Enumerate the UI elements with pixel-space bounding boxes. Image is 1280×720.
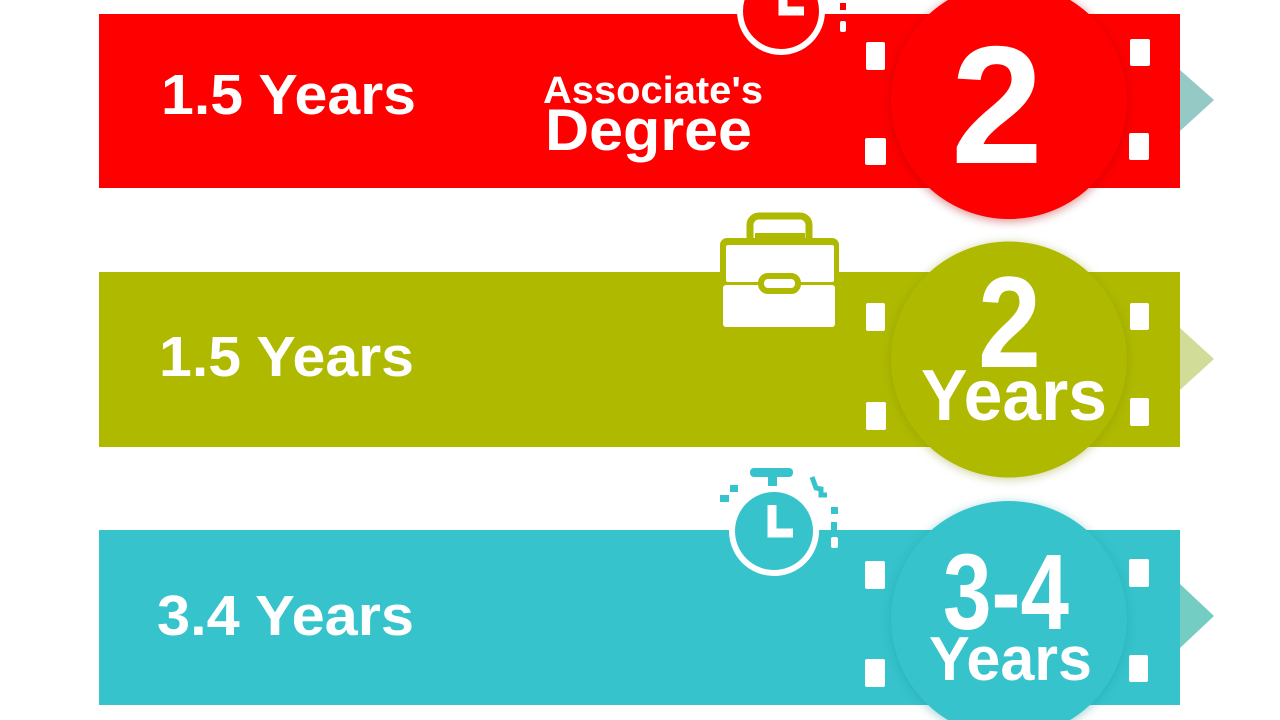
panel: teal row [99, 468, 1214, 720]
film marks: olive row [866, 303, 1149, 430]
icon: briefcase [720, 216, 839, 327]
heading: Associate's Degree: Degree [545, 98, 752, 163]
heading: Associate's Degree [543, 70, 763, 163]
arrow: red row pointer [1180, 70, 1214, 131]
label: teal row duration: 3.4 Years [157, 584, 414, 648]
arrow: teal row pointer [1180, 584, 1214, 648]
badge: olive circle, 2 Years [891, 242, 1127, 478]
icon: stopwatch, teal [720, 468, 838, 573]
icon: stopwatch, red [740, 0, 846, 52]
badge: olive circle, 2 Years: Years [921, 356, 1107, 436]
badge: red circle, 2: 2 [951, 11, 1043, 199]
panel: olive row [99, 216, 1214, 479]
bar: teal [99, 530, 1180, 705]
film marks: red row [865, 39, 1150, 165]
badge: red circle, 2 [891, 0, 1127, 219]
label: red row duration: 1.5 Years [161, 63, 416, 127]
badge: olive circle, 2 Years: 2 [978, 249, 1041, 395]
bar: olive [99, 272, 1180, 447]
label: olive row duration: 1.5 Years [159, 325, 414, 389]
badge: teal circle, 3-4 Years: 3-4 [943, 531, 1069, 652]
bar: red [99, 14, 1180, 188]
arrow: olive row pointer [1180, 328, 1214, 390]
badge: teal circle, 3-4 Years [891, 501, 1127, 720]
panel: red row, Associate's Degree [99, 0, 1214, 221]
badge: teal circle, 3-4 Years: Years [929, 625, 1092, 694]
heading: Associate's Degree: Associate's [543, 70, 763, 112]
film marks: teal row [865, 559, 1149, 687]
